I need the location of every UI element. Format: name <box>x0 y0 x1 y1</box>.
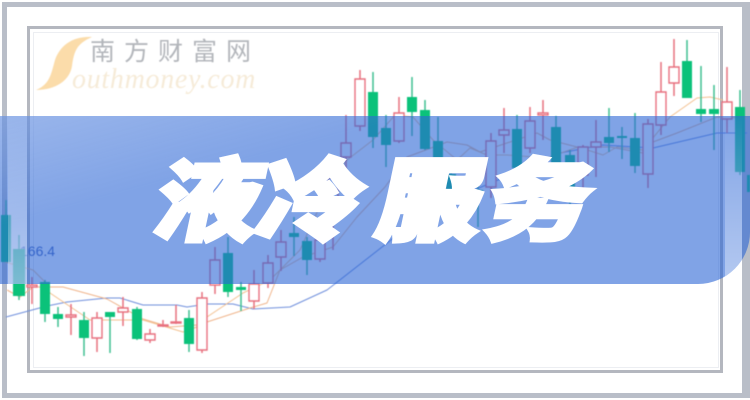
green candle bodies <box>1 61 750 344</box>
title character 2: 冷 <box>247 129 379 260</box>
moving average lines <box>5 97 747 332</box>
left light strip <box>8 116 27 284</box>
brand url: outhmoney.com <box>72 64 256 95</box>
green candle wicks <box>6 40 750 356</box>
red candle bodies <box>27 67 732 350</box>
fast orange moving average <box>5 97 723 332</box>
blue title band <box>0 116 750 284</box>
title character 1: 液 <box>145 129 277 260</box>
icon: orange swoosh <box>36 37 92 90</box>
inner chart hairline frame <box>33 32 719 368</box>
red candle wicks <box>32 39 727 353</box>
title character 3: 服 <box>367 129 499 260</box>
title character 4: 务 <box>475 129 607 260</box>
right light strip <box>725 116 742 284</box>
brand name: 南方财富网 <box>90 32 260 68</box>
slow blue moving average <box>6 133 747 317</box>
mid orange-red moving average <box>7 117 747 327</box>
axis value label: 166.4 <box>20 243 55 259</box>
watermark: southmoney logo <box>36 32 260 95</box>
